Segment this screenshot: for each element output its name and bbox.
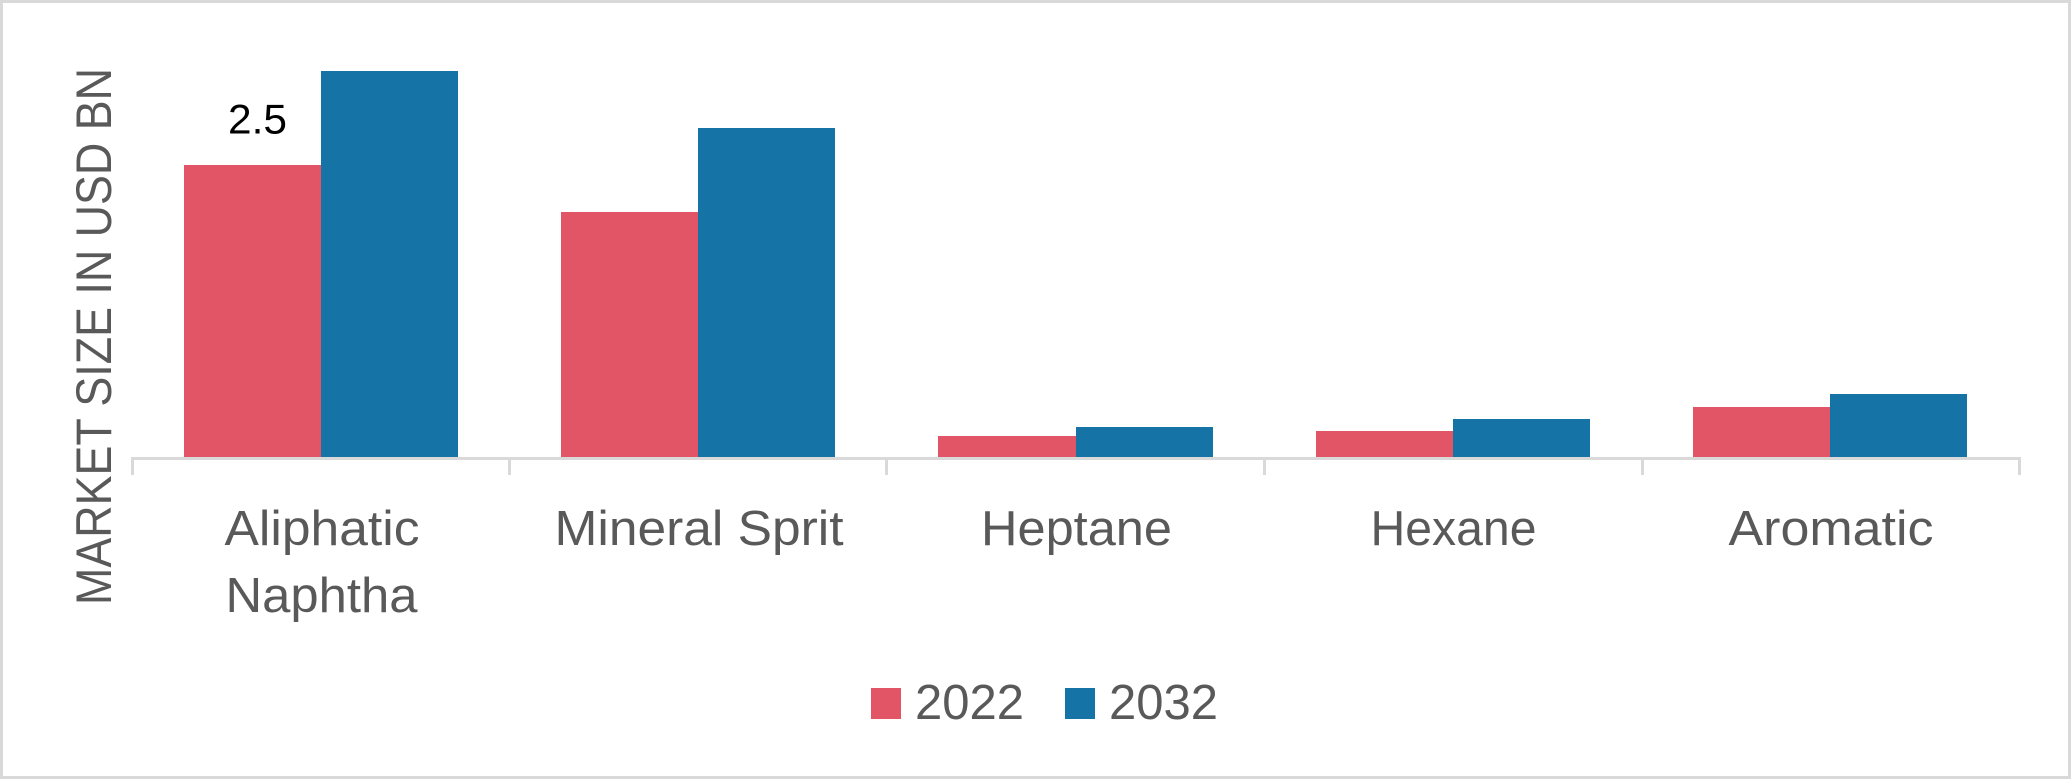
bar group: Aliphatic Naphtha <box>184 71 458 457</box>
category label: Heptane: Heptane <box>981 502 1172 556</box>
category label: Hexane: Hexane <box>1370 502 1536 556</box>
x axis <box>131 457 2021 475</box>
data label: 2.5: 2.5 <box>228 96 287 142</box>
bar group: Mineral Sprit <box>561 128 835 457</box>
category label: Mineral Sprit: Mineral Sprit <box>554 502 844 556</box>
category label: Aromatic: Aromatic <box>1728 502 1934 556</box>
y axis title: MARKET SIZE IN USD BN <box>66 68 122 605</box>
category label: Aliphatic Naphtha <box>224 502 420 623</box>
bar group: Aromatic <box>1693 394 1967 457</box>
bar group: Heptane <box>938 427 1213 457</box>
legend label: 2022: 2022 <box>915 676 1024 730</box>
bar group: Hexane <box>1316 419 1590 457</box>
category label: Aliphatic Naphtha: Aliphatic <box>224 502 420 556</box>
legend swatch: 2022 <box>871 688 901 719</box>
category label: Aliphatic Naphtha: Naphtha <box>226 569 418 623</box>
legend label: 2032: 2032 <box>1109 676 1218 730</box>
legend <box>871 676 1218 730</box>
legend swatch: 2032 <box>1065 688 1095 719</box>
